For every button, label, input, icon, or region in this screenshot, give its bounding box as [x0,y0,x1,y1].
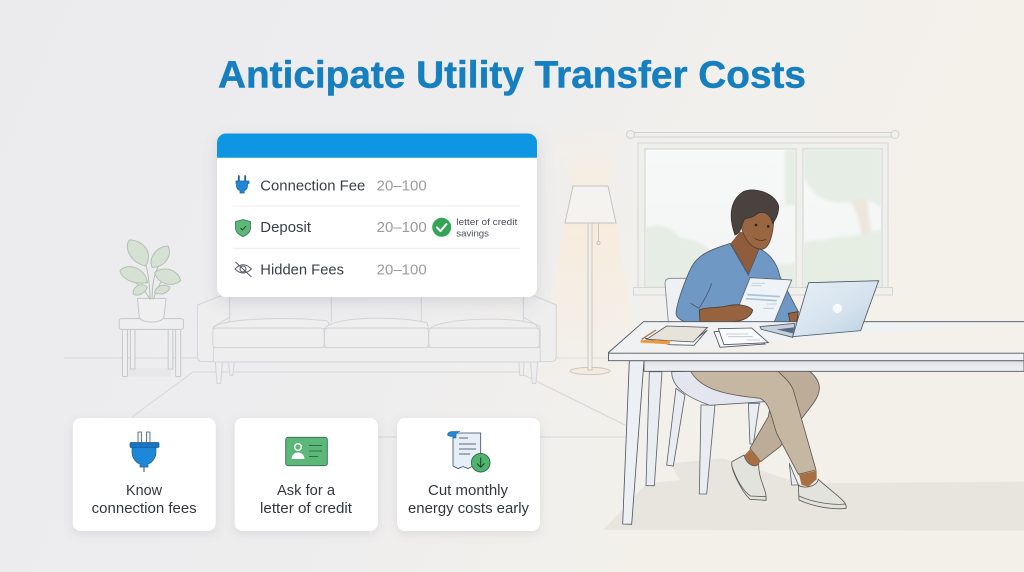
near foot [799,471,817,487]
side table [119,319,184,377]
floor shadow under desk [603,458,1024,531]
hair [731,190,779,235]
panel: cut energy costs [397,418,540,531]
row: connection fee [236,176,427,195]
table header bar [217,134,537,158]
panel: know connection fees: connection fees [92,501,197,517]
document [732,278,792,324]
title: Anticipate Utility Transfer Costs [218,54,806,96]
garden trees left [645,150,796,287]
savings note [456,217,518,240]
hand [699,305,753,323]
row: deposit: 20–100 [377,220,427,236]
icon: plug [130,432,159,472]
icon: id card [286,437,327,466]
plant pot [137,298,166,322]
window frame [638,143,888,289]
desk top [608,322,1024,361]
eyes [755,224,757,226]
savings note: savings [456,229,489,240]
panel: letter of credit [235,418,378,531]
row: deposit [236,217,518,240]
near leg [690,370,816,474]
row: hidden fees [235,262,427,279]
plant leaves [120,240,181,299]
panel: know connection fees: Know [126,483,163,499]
floor area warm tone [560,372,1024,572]
plant on side table [119,240,184,377]
panel: cut energy costs: energy costs early [408,501,530,517]
savings note: letter of credit [456,217,518,228]
icon: eye slash [235,262,252,277]
chair back [665,278,688,322]
panel: letter of credit: Ask for a [277,483,336,499]
person [676,190,846,509]
window sill [634,288,892,295]
row: deposit: Deposit [260,220,311,236]
panel: know connection fees [73,418,216,531]
row: connection fee: 20–100 [377,179,427,195]
far leg [750,370,819,462]
neck [731,232,762,275]
floor lamp [565,186,616,375]
torso [676,243,798,324]
row: connection fee: Connection Fee [260,179,365,195]
window panes [645,149,796,287]
row: hidden fees: Hidden Fees [260,263,344,279]
laptop [760,281,879,337]
floor and rug lines [64,358,625,437]
icon: shield [236,220,250,236]
icon: small plug [236,176,249,193]
legs [690,370,846,509]
desk back leg [646,372,662,486]
mouth [755,238,766,240]
papers [714,330,765,347]
panel: cut energy costs: Cut monthly [428,483,509,499]
chair seat [672,370,765,405]
icon: receipt [448,432,490,472]
garden trees right [803,149,882,287]
folder and pencil [641,326,768,347]
icon: check badge [432,218,451,237]
panel: cost table [217,134,537,297]
desk front leg and apron [623,361,1024,524]
window [626,130,899,295]
row: hidden fees: 20–100 [377,263,427,279]
panel: letter of credit: letter of credit [260,501,352,517]
sofa [197,280,556,383]
desk [608,281,1024,524]
chair legs [667,388,685,466]
face [740,202,774,249]
lamp glow [535,125,645,400]
far foot [743,449,761,467]
upper body [676,190,798,324]
curtain rod [626,130,899,138]
chair and desk back legs [646,370,798,494]
